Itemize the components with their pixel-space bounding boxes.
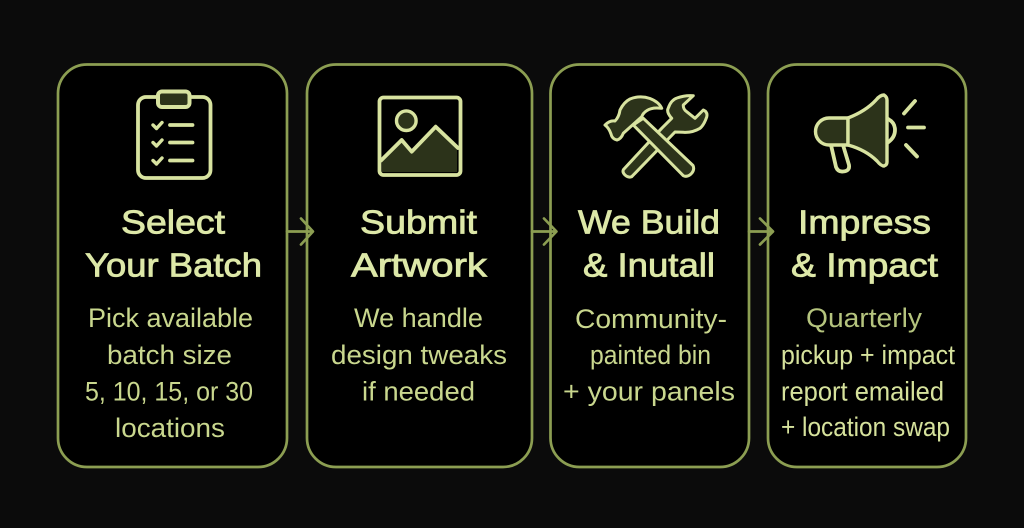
text block: painted bin [590, 340, 711, 370]
text block [85, 303, 253, 443]
text block [563, 304, 735, 406]
heading: & Inutall [583, 246, 715, 284]
icon: megaphone [816, 95, 924, 172]
text block [331, 303, 507, 406]
icon: hammer and wrench [605, 96, 707, 177]
text block: We handle [354, 303, 483, 333]
heading [791, 204, 938, 284]
heading: We Build [578, 204, 720, 240]
text block: 5, 10, 15, or 30 [85, 376, 253, 406]
icon: image [380, 98, 460, 175]
heading: Impress [798, 204, 931, 240]
text block: Pick available [88, 303, 253, 333]
text block: Community- [575, 304, 727, 334]
text block: batch size [107, 340, 232, 370]
arrow: step 2 to step 3 [532, 218, 556, 244]
icon: clipboard [138, 92, 210, 178]
text block: design tweaks [331, 340, 507, 370]
text block: locations [115, 413, 225, 443]
panel: impress and impact [768, 64, 966, 467]
text block [781, 303, 956, 442]
heading [351, 204, 488, 284]
heading: Artwork [351, 246, 488, 284]
text block: Quarterly [806, 303, 923, 333]
text block: + your panels [563, 376, 735, 406]
heading: Your Batch [85, 246, 262, 284]
heading: Select [121, 204, 225, 240]
heading: & Impact [791, 246, 938, 284]
text block: pickup + impact [781, 340, 956, 370]
panel: select your batch [58, 64, 287, 467]
text block: + location swap [781, 412, 950, 442]
heading [85, 204, 262, 284]
arrow: step 1 to step 2 [287, 218, 313, 244]
panel: submit artwork [307, 64, 532, 467]
text block: report emailed [781, 376, 944, 406]
heading [578, 204, 720, 284]
panel: we build and install [550, 64, 749, 467]
text block: if needed [362, 376, 475, 406]
arrow: step 3 to step 4 [749, 218, 773, 244]
heading: Submit [360, 204, 477, 240]
